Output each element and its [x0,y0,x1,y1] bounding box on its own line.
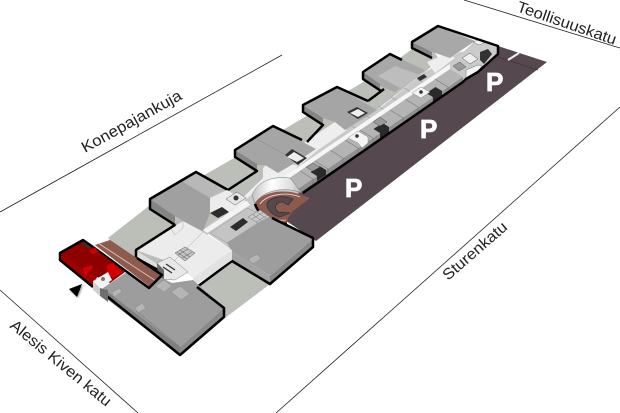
courtyards [108,40,440,318]
rotunda courtyard [255,192,310,224]
street line: Alesis Kiven katu [0,290,138,413]
white floor zones [232,53,455,208]
red entrance block [60,240,125,287]
entrance arrow [69,284,82,297]
street line: Sturenkatu [276,107,620,413]
street label: Konepajankuja: Konepajankuja [79,87,185,156]
street line: Konepajankuja [0,55,282,212]
parking sign 3: P [486,67,503,97]
street label: Alesis Kiven katu: Alesis Kiven katu [6,317,114,410]
block: upper left [136,172,228,250]
parking sign 1: P [345,173,362,203]
dark shop unit 1 [310,166,326,181]
brown passage strip [93,240,162,288]
upper tile row [350,79,427,131]
block: lower right [197,217,313,287]
rotunda wall [252,178,302,204]
street label: Sturenkatu: Sturenkatu [439,219,511,284]
icon tile 1 [348,131,368,148]
central zone with tiles [203,190,270,243]
icon tile 2 [412,87,430,98]
round entrance lobby [93,272,112,302]
block: third upper [303,87,384,142]
dark shop unit 2 [374,123,389,138]
central white block [136,220,232,287]
street line: Teollisuuskatu [464,0,620,48]
block: fourth upper [363,54,427,92]
spine floor [203,46,498,250]
parking sign 2: P [420,114,437,144]
block: second upper [228,126,316,190]
hatched tiles [306,62,466,171]
parking area [270,46,547,241]
dark shop unit 3 [426,87,442,102]
block: top end [303,26,498,193]
hatched box [175,247,195,261]
stairwell [157,257,188,280]
block: lower left [93,270,224,355]
street label: Teollisuuskatu: Teollisuuskatu [515,0,619,49]
front shop row [285,69,463,194]
corridor band [285,64,450,181]
